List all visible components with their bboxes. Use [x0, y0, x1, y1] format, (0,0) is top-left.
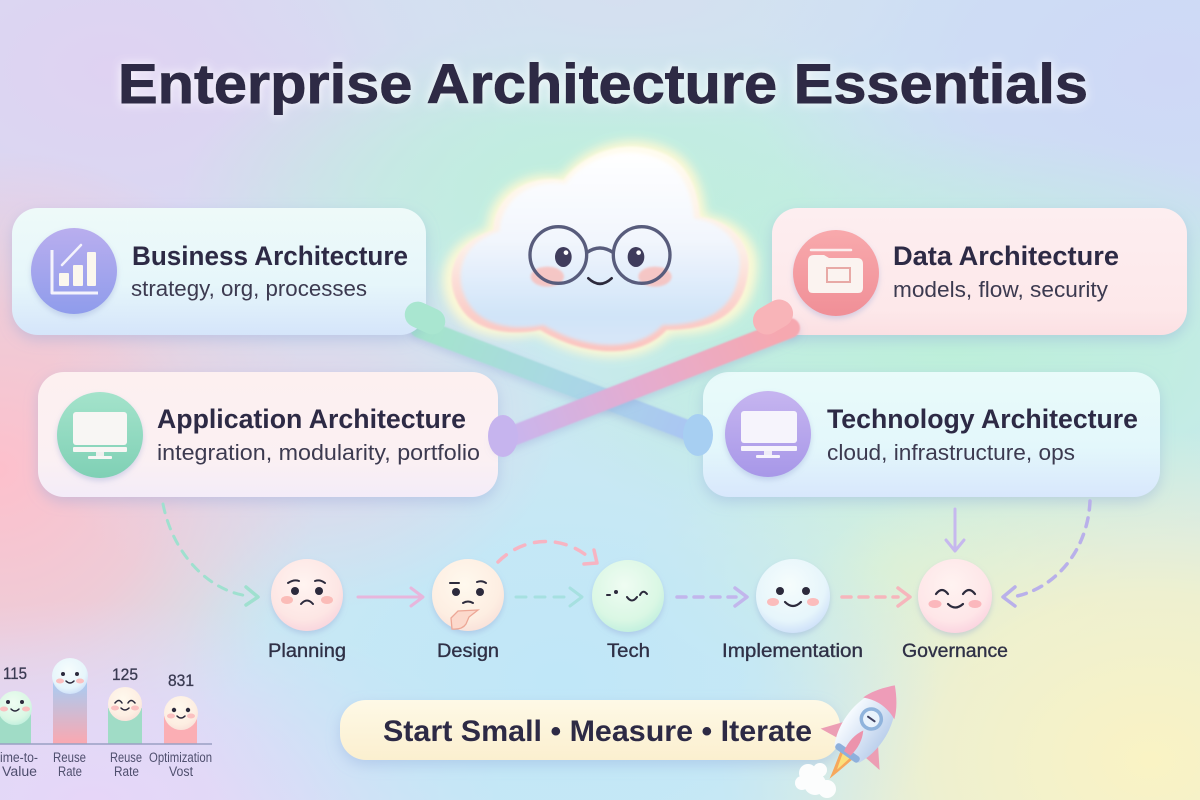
- label: tech: Tech: [607, 640, 650, 662]
- value: 831: 831: [168, 671, 194, 690]
- step: implementation: [756, 559, 830, 633]
- heading: data architecture: Data Architecture: [893, 241, 1119, 271]
- label: reuse rate: [54, 752, 86, 776]
- label: second reuse rate: [110, 752, 142, 776]
- step: planning: [271, 559, 343, 631]
- bar: optimization: [164, 696, 198, 744]
- text: application details: integration, modularity, portfolio: [157, 440, 480, 465]
- label: time-to-value: ime-to-: [0, 750, 38, 765]
- label: optimization: Vost: [169, 764, 193, 779]
- icon: folder: [793, 230, 879, 316]
- arrow: technology curve to governance: [1003, 501, 1090, 606]
- label: optimization: [150, 752, 212, 776]
- cloud face: [530, 227, 672, 287]
- arrow: design over to tech: [498, 541, 597, 564]
- value: 125: 125: [112, 665, 138, 684]
- step: design: [432, 559, 504, 631]
- text: technology details: cloud, infrastructure, ops: [827, 440, 1075, 465]
- connector knobs: business to technology: [400, 297, 713, 456]
- label: implementation: Implementation: [722, 640, 863, 662]
- connector: business to technology: [420, 328, 700, 435]
- chart axis: [0, 743, 212, 745]
- face: winking: [607, 590, 647, 600]
- icon: monitor: [57, 392, 143, 478]
- heading: technology architecture: Technology Architecture: [827, 404, 1138, 434]
- text: business details: strategy, org, processes: [131, 276, 367, 301]
- bar: reuse rate: [52, 658, 88, 744]
- icon: rocket: [795, 665, 924, 799]
- heading: application architecture: Application Architecture: [157, 404, 466, 434]
- arrow: application to planning: [163, 504, 258, 605]
- label: governance: Governance: [902, 640, 1008, 662]
- label: time-to-value: Value: [2, 764, 37, 779]
- label: planning: Planning: [268, 640, 346, 662]
- callout text: Start Small • Measure • Iterate: [383, 715, 812, 748]
- step: tech: [592, 560, 664, 632]
- panel: data architecture: [772, 208, 1187, 335]
- label: reuse rate: Reuse: [53, 750, 86, 765]
- panel: business architecture: [12, 208, 426, 335]
- heading: business architecture: Business Architecture: [132, 241, 408, 271]
- label: design: Design: [437, 640, 499, 662]
- face: thinking: [450, 581, 486, 629]
- arrow: planning to design: [358, 588, 423, 606]
- label: optimization: Optimization: [149, 750, 212, 765]
- panel: application architecture: [38, 372, 498, 497]
- value: 115: 115: [3, 664, 27, 683]
- panel: technology architecture: [703, 372, 1160, 497]
- icon: bar chart: [31, 228, 117, 314]
- face: smiling: [767, 587, 819, 606]
- arrow: implementation to governance: [842, 588, 910, 606]
- cloud mascot with glasses: [443, 140, 758, 357]
- title: Enterprise Architecture Essentials: [118, 52, 1088, 115]
- arrow: tech to implementation: [677, 588, 747, 606]
- step: governance: [918, 559, 992, 633]
- text: data details: models, flow, security: [893, 277, 1109, 302]
- bar: second reuse rate: [108, 687, 142, 744]
- bar chart: metrics: [0, 658, 212, 779]
- face: happy: [928, 590, 982, 608]
- callout: start small, measure, iterate: [340, 700, 840, 760]
- bar: time-to-value: [0, 691, 32, 744]
- label: reuse rate: Rate: [58, 764, 82, 779]
- arrow: design to tech: [516, 588, 582, 606]
- connector: data to application: [488, 294, 798, 457]
- icon: monitor: [725, 391, 811, 477]
- rocket smoke: [795, 763, 836, 798]
- label: second reuse rate: Rate: [114, 764, 139, 779]
- label: second reuse rate: Reuse: [110, 750, 142, 765]
- face: worried: [281, 580, 333, 604]
- arrow: technology down to governance: [946, 509, 964, 551]
- label: time-to-value: [0, 752, 38, 776]
